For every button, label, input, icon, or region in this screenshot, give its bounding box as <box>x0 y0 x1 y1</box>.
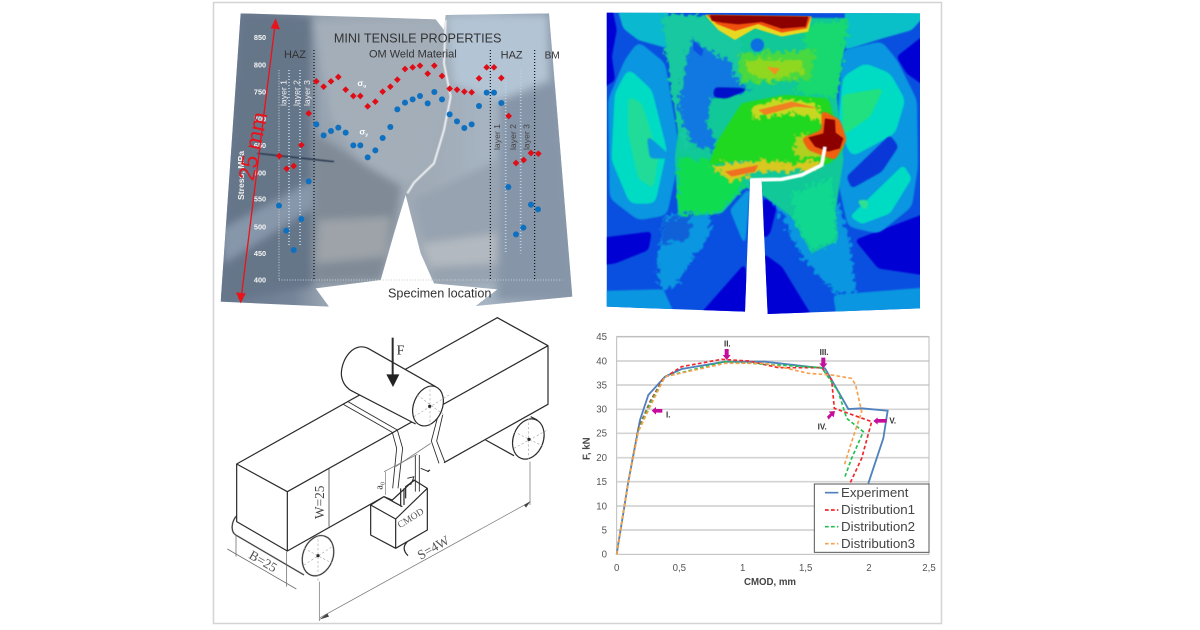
marker labels: V. <box>889 417 896 426</box>
width dimension: B=25 <box>246 547 280 575</box>
y axis ticks: 450 <box>254 249 266 258</box>
dotted zone lines <box>279 50 562 280</box>
zone labels: Specimen location <box>388 287 491 301</box>
crack length dimension <box>374 454 417 495</box>
CMOD gauge <box>371 455 429 556</box>
weld seam <box>343 402 445 488</box>
y axis ticks: 650 <box>254 141 266 150</box>
dimension arrow: 25 mm <box>236 18 280 303</box>
central body <box>663 17 848 253</box>
y axis labels: 15 <box>596 477 607 488</box>
panel: mini tensile properties on weld macrograph: σ <box>359 127 365 137</box>
marker labels <box>666 340 896 432</box>
force arrow <box>386 338 405 387</box>
x axis labels <box>614 563 936 574</box>
weld warm region <box>708 95 845 170</box>
layer labels: layer 2 <box>508 124 518 150</box>
x axis labels: 2 <box>866 563 872 574</box>
crack tip hot zone <box>802 110 847 160</box>
grid lines <box>617 337 929 530</box>
x axis labels: 0 <box>614 563 619 574</box>
zone labels <box>284 48 560 301</box>
yield strength dots <box>276 89 541 253</box>
series labels: σ <box>357 78 363 88</box>
x axis labels: 2,5 <box>922 563 936 574</box>
legend: Distribution3 <box>841 536 915 551</box>
light blue zones <box>608 42 680 220</box>
marker arrows <box>652 349 887 425</box>
y axis labels: 40 <box>596 356 607 367</box>
height dimension: W=25 <box>312 485 327 519</box>
marker labels: III. <box>820 348 829 357</box>
panel: FE contour plot <box>585 0 938 330</box>
y axis labels: 25 <box>596 429 607 440</box>
panel: force versus CMOD chart: F, kN <box>582 437 593 460</box>
y axis labels: 20 <box>596 453 607 464</box>
blue band <box>847 135 898 188</box>
y axis ticks <box>254 33 266 285</box>
cyan lobes <box>612 68 667 203</box>
layer labels <box>279 80 531 150</box>
legend <box>814 484 929 552</box>
ultimate strength diamonds <box>276 62 542 172</box>
marker labels: I. <box>666 411 670 420</box>
panel: force versus CMOD chart <box>582 332 936 588</box>
crack path <box>750 147 825 180</box>
force arrow: F <box>397 343 405 358</box>
y axis ticks: 800 <box>254 60 266 69</box>
marker labels: II. <box>724 340 731 349</box>
marker labels: IV. <box>818 423 827 432</box>
beam <box>237 318 548 551</box>
y axis labels: 5 <box>602 525 607 536</box>
CMOD gauge: CMOD <box>396 506 426 531</box>
layer labels: layer 3 <box>302 80 312 106</box>
y axis labels <box>596 332 607 561</box>
y axis labels: 45 <box>596 332 607 343</box>
page frame <box>214 2 942 624</box>
x axis labels: 1 <box>740 563 745 574</box>
x axis labels: 0,5 <box>673 563 686 574</box>
y axis ticks: 600 <box>254 168 266 177</box>
contour base <box>602 10 925 317</box>
y axis title: Stress, MPa <box>236 151 246 200</box>
width dimension <box>227 535 296 589</box>
x axis labels: 1,5 <box>799 563 812 574</box>
y axis ticks: 500 <box>254 222 266 231</box>
y axis labels: 35 <box>596 380 607 391</box>
panel: three-point bending specimen <box>227 318 549 621</box>
bottom right roller <box>486 414 549 464</box>
y axis ticks: 850 <box>254 33 266 42</box>
layer labels: layer 3 <box>521 124 531 150</box>
central blue pocket <box>678 40 752 150</box>
top hot zone <box>705 15 812 40</box>
layer labels: layer 1 <box>279 80 289 106</box>
layer labels: layer 1 <box>492 124 502 150</box>
span dimension: S=4W <box>415 532 452 563</box>
teal top corners <box>618 12 670 48</box>
axis titles: CMOD, mm <box>744 577 796 588</box>
top roller <box>341 347 449 431</box>
zone labels: HAZ <box>501 50 523 62</box>
panel: mini tensile properties on weld macrograph: y <box>365 132 368 138</box>
y axis ticks: 400 <box>254 276 266 285</box>
zone labels: OM Weld Material <box>369 48 457 60</box>
y axis labels: 30 <box>596 405 607 416</box>
specimen macrograph <box>214 10 577 310</box>
crack length dimension: a₀ <box>374 481 385 490</box>
height dimension <box>312 469 329 527</box>
layer labels: layer 2 <box>291 80 301 106</box>
curves <box>617 359 888 554</box>
y axis ticks: 700 <box>254 114 266 123</box>
legend: Experiment <box>841 485 909 500</box>
zone labels: HAZ <box>284 49 306 61</box>
series labels: u <box>363 83 366 89</box>
span dimension <box>319 462 531 621</box>
outer dark blue zones <box>606 12 618 87</box>
zone labels: BM <box>545 51 560 62</box>
legend: Distribution2 <box>841 519 915 534</box>
y axis labels: 0 <box>602 550 607 561</box>
plot frame <box>617 337 929 554</box>
y axis ticks: 750 <box>254 87 266 96</box>
bottom left roller <box>232 515 339 582</box>
panel: mini tensile properties on weld macrograph <box>214 10 577 310</box>
notch <box>762 180 763 184</box>
y axis ticks: 550 <box>254 195 266 204</box>
dimension label: 25 mm <box>233 110 273 183</box>
heading: MINI TENSILE PROPERTIES <box>334 32 501 46</box>
legend: Distribution1 <box>841 502 915 517</box>
y axis labels: 10 <box>596 501 607 512</box>
